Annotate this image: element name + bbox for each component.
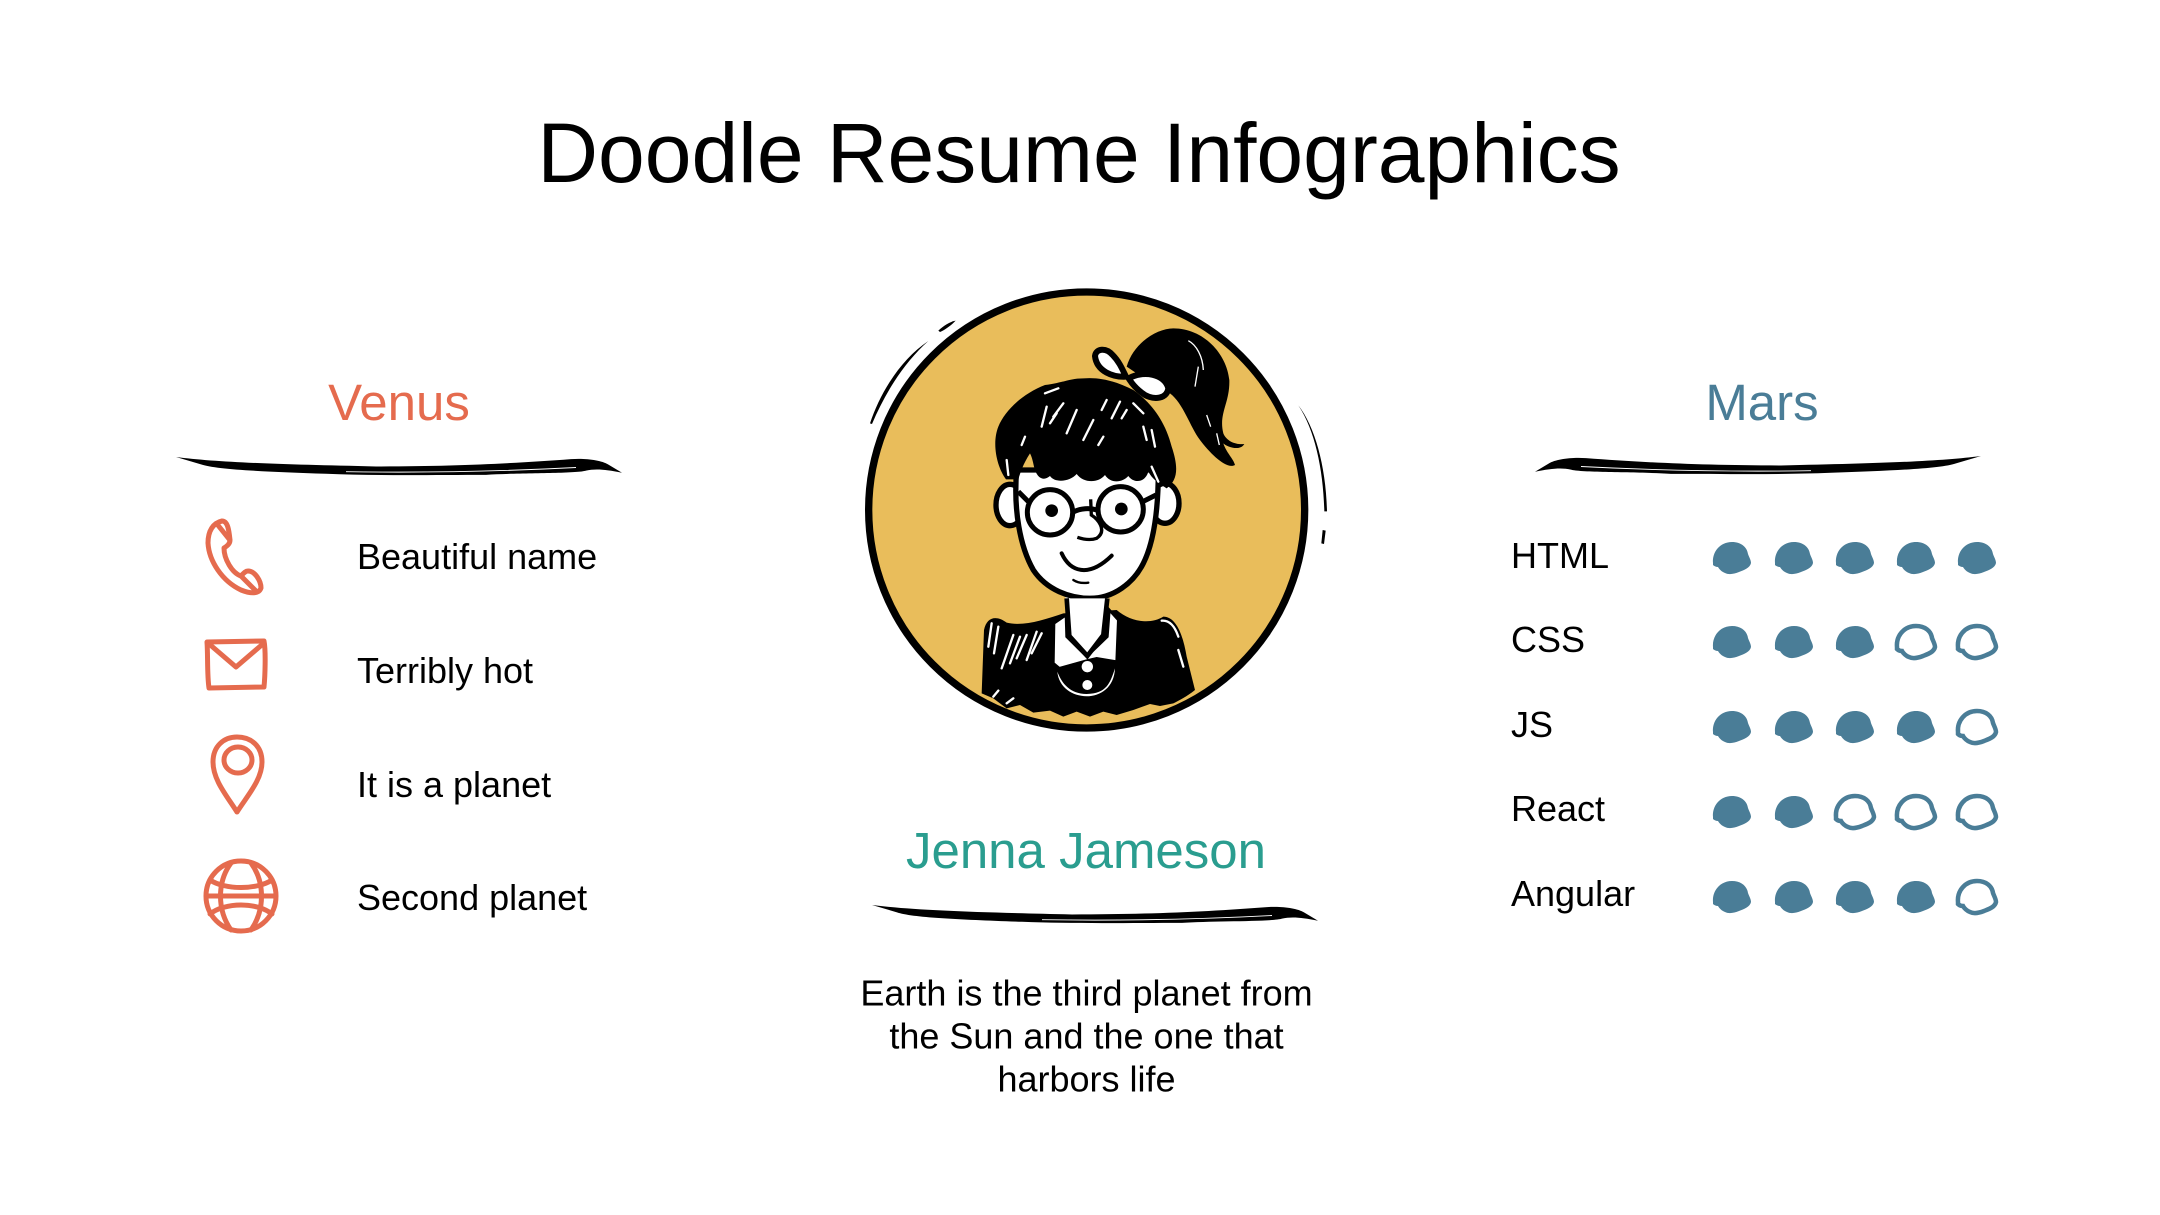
ponytail	[1127, 328, 1244, 466]
description text: harbors life	[997, 1058, 1176, 1100]
description text: Earth is the third planet from	[860, 972, 1313, 1014]
title: Doodle Resume Infographics	[537, 106, 1621, 200]
glasses	[1018, 487, 1156, 535]
sketch marks around circle	[870, 321, 1327, 544]
skill labels	[1511, 535, 1635, 914]
portrait: avatar in yellow circle	[869, 292, 1327, 728]
name: Jenna Jameson: Jenna Jameson	[906, 822, 1266, 879]
text: Terribly hot: Terribly hot	[357, 650, 533, 691]
heading: Mars: Mars	[1705, 374, 1819, 431]
brooch	[1057, 668, 1115, 696]
heading: Venus: Venus	[328, 374, 470, 431]
neck	[1065, 590, 1108, 640]
icon: envelope	[207, 641, 265, 688]
brush stroke under name	[872, 905, 1318, 923]
text: Beautiful name: Beautiful name	[357, 536, 597, 577]
icon: globe	[206, 861, 276, 931]
rating dots: HTML	[1713, 542, 1996, 574]
skill labels: JS	[1511, 704, 1553, 745]
panel: Venus contact	[176, 374, 622, 931]
jacket highlights	[988, 621, 1183, 703]
mouth	[1062, 553, 1112, 570]
description text: the Sun and the one that	[889, 1016, 1284, 1056]
icon: map pin	[213, 737, 262, 812]
skill labels: Angular	[1511, 873, 1635, 914]
text: Second planet: Second planet	[357, 877, 587, 918]
hair highlights	[1007, 388, 1158, 482]
hair bow	[1095, 350, 1168, 398]
panel: Mars skills	[1511, 374, 1996, 914]
pupils	[1045, 504, 1058, 517]
circle background	[869, 292, 1305, 728]
rating dots: Angular	[1713, 881, 1996, 913]
rating dots: React	[1713, 796, 1996, 828]
icon: phone	[208, 521, 261, 593]
face	[1016, 470, 1158, 598]
ear left	[996, 484, 1024, 526]
shirt collar and neck	[1053, 610, 1118, 668]
skill labels: HTML	[1511, 535, 1609, 576]
hair	[995, 378, 1176, 488]
brush stroke under Mars	[1535, 456, 1981, 474]
jacket	[982, 610, 1195, 717]
ear right	[1151, 483, 1179, 523]
nose	[1077, 499, 1102, 540]
skill labels: React	[1511, 788, 1605, 829]
text: It is a planet: It is a planet	[357, 764, 551, 805]
brush stroke under Venus	[176, 457, 622, 475]
rating dots: CSS	[1713, 626, 1996, 658]
rating dots: JS	[1713, 711, 1996, 743]
skill labels: CSS	[1511, 619, 1585, 660]
